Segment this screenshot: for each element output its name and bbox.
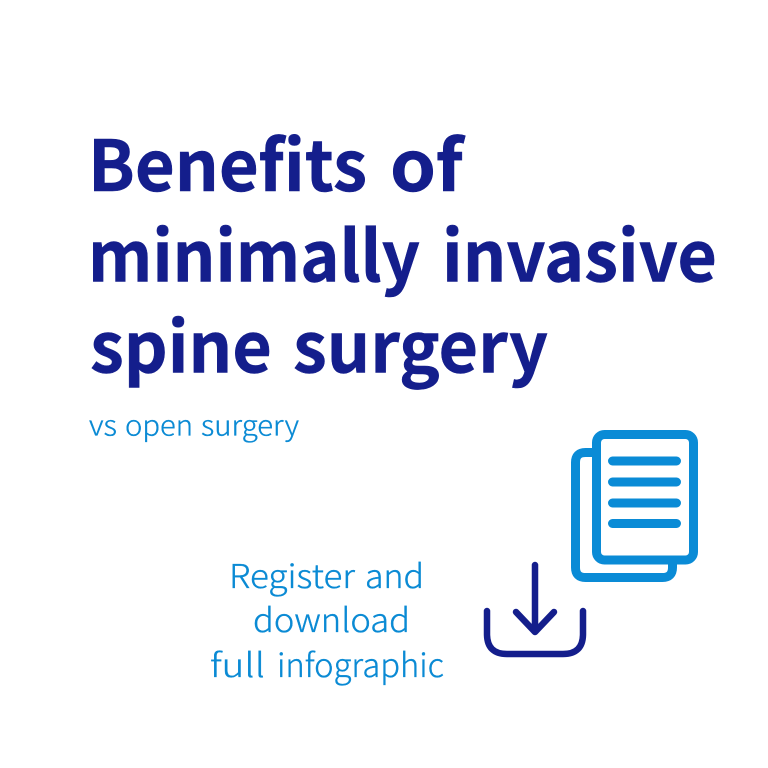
icon: download arrow and tray [487,565,583,654]
subtitle: open [125,404,193,444]
title: spine [90,292,272,394]
call to action text: Register [229,550,355,598]
call to action text: full [210,639,265,687]
title: surgery [293,292,548,394]
title: of [390,111,466,212]
title [88,111,717,394]
call to action text: infographic [277,639,444,687]
title: minimally [88,202,420,302]
icon: documents [576,434,694,578]
call to action text [210,550,444,687]
call to action text: and [365,550,424,598]
title: invasive [442,202,717,302]
title: Benefits [88,111,367,212]
subtitle: surgery [201,404,299,444]
call to action text: download [253,594,410,642]
subtitle: vs [89,404,117,444]
